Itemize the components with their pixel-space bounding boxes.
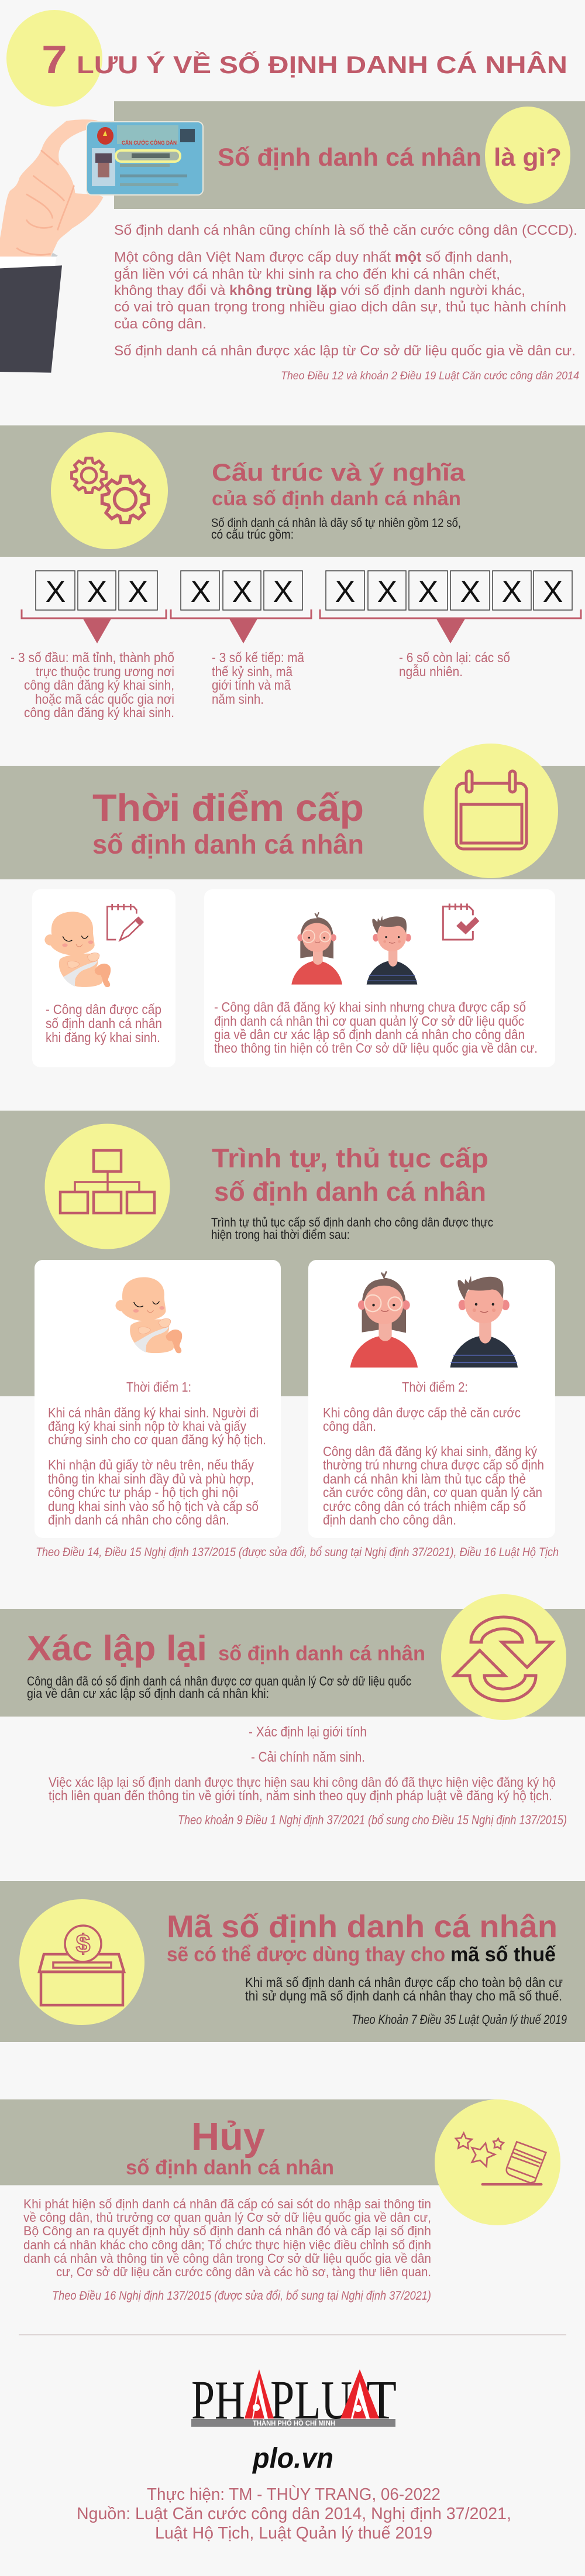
text block: gắn liền với cá nhân từ khi sinh ra cho đến khi cá nhân chết, (114, 266, 500, 282)
card text: gia về dân cư xác lập số định danh cá nhân cho công dân (214, 1027, 525, 1042)
panel: re-establish (0, 1594, 585, 1827)
heading (126, 2115, 334, 2179)
icon: notepad with pencil (107, 904, 143, 940)
caption: next 3 digits (212, 650, 304, 707)
band (0, 1881, 585, 2042)
heading: Thời điểm cấp (92, 786, 364, 829)
icon: coin box: $ (76, 1930, 90, 1958)
icon: notepad with check (443, 903, 479, 940)
text block (245, 1975, 563, 2003)
digit labels: X (46, 575, 66, 609)
card text: đăng ký khai sinh nộp tờ khai và giấy (48, 1419, 246, 1434)
card text: khi đăng ký khai sinh. (46, 1030, 160, 1045)
digit labels: X (543, 575, 563, 609)
title: LƯU Ý VỀ SỐ ĐỊNH DANH CÁ NHÂN (77, 50, 567, 78)
icon: baby (44, 912, 111, 987)
card: time 2 (308, 1260, 555, 1538)
heading: của số định danh cá nhân (212, 488, 461, 510)
icon: org chart (44, 1124, 170, 1249)
icon: coin box (19, 1899, 144, 2025)
heading: mã số thuế (450, 1943, 556, 1966)
heading (212, 458, 466, 510)
text block: danh cá nhân và thông tin về công dân trong Cơ sở dữ liệu quốc gia về dân (23, 2251, 431, 2266)
digit labels: X (232, 575, 252, 609)
intro text: có cấu trúc gồm: (211, 528, 294, 542)
caption: first 3 digits: công dân đăng ký khai sinh, (24, 677, 174, 693)
text block: tịch liên quan đến thông tin về giới tính, năm sinh theo quy định pháp luật về đăng ký hộ tịch. (49, 1788, 552, 1803)
heading: Số định danh cá nhân (218, 143, 481, 172)
heading: Hủy (191, 2115, 265, 2159)
text block: Khi phát hiện số định danh cá nhân đã cấp có sai sót do nhập sai thông tin (23, 2197, 431, 2211)
card: time 1 (35, 1260, 281, 1538)
caption: next 3 digits: giới tính và mã (212, 677, 291, 693)
card text: - Công dân đã đăng ký khai sinh nhưng chưa được cấp số (214, 999, 526, 1015)
panel: tax code (0, 1881, 585, 2042)
card text: chứng sinh cho cơ quan đăng ký hộ tịch. (48, 1432, 266, 1447)
caption: first 3 digits: công dân đăng ký khai sinh. (24, 705, 174, 720)
logo: T (366, 2370, 397, 2431)
heading band (0, 425, 585, 557)
logo: PLU (270, 2370, 352, 2431)
heading band (0, 1609, 585, 1717)
heading (212, 1143, 488, 1207)
logo: PH (191, 2370, 245, 2431)
card text (46, 1002, 162, 1045)
text block: về công dân, thủ trưởng cơ quan quản lý Cơ sở dữ liệu quốc gia về dân cư, (23, 2210, 431, 2225)
card text: Khi công dân được cấp thẻ căn cước (323, 1405, 521, 1420)
caption: next 3 digits: thế kỷ sinh, mã (212, 664, 292, 679)
card text (214, 999, 538, 1056)
digit labels: X (377, 575, 397, 609)
card text: công dân. (323, 1419, 376, 1434)
icon: man (367, 916, 417, 985)
heading band (114, 101, 585, 209)
icon: gears (51, 432, 168, 549)
id card: CĂN CƯỚC CÔNG DÂN (122, 139, 177, 146)
text block: có vai trò quan trọng trong nhiều giao dịch dân sự, thủ tục hành chính (114, 299, 566, 315)
credits: Thực hiện: TM - THÙY TRANG, 06-2022 (147, 2485, 441, 2504)
heading: số định danh cá nhân (92, 829, 364, 859)
intro text: hiện trong hai thời điểm sau: (211, 1228, 350, 1242)
icon: hand holding card (0, 119, 104, 373)
card text: thông tin khai sinh đầy đủ và phù hợp, (48, 1471, 254, 1486)
heading: số định danh cá nhân (218, 1642, 425, 1665)
credits: Nguồn: Luật Căn cước công dân 2014, Nghị định 37/2021, (77, 2505, 511, 2523)
list (249, 1724, 367, 1765)
intro text: Công dân đã có số định danh cá nhân được cơ quan quản lý Cơ sở dữ liệu quốc (27, 1674, 411, 1688)
panel: intro (0, 10, 585, 382)
caption: last 6 digits: ngẫu nhiên. (399, 664, 463, 679)
card text: cước công dân có trách nhiệm cấp số (323, 1499, 526, 1514)
card: at birth registration (32, 889, 176, 1067)
credits: Luật Hộ Tịch, Luật Quản lý thuế 2019 (155, 2524, 432, 2543)
card text: - Công dân được cấp (46, 1002, 161, 1017)
intro text (211, 516, 461, 542)
text block (23, 2197, 431, 2279)
digit labels: X (418, 575, 438, 609)
text block (49, 1775, 556, 1803)
icon: woman (291, 912, 342, 985)
text block: Một công dân Việt Nam được cấp duy nhất một số định danh, (114, 249, 512, 265)
card text: dung khai sinh vào sổ hộ tịch và cấp số (48, 1499, 259, 1514)
heading: là gì? (494, 143, 562, 172)
card text: Khi nhận đủ giấy tờ nêu trên, nếu thấy (48, 1457, 254, 1472)
heading: số định danh cá nhân (214, 1177, 486, 1207)
title: 7 (42, 37, 67, 82)
panel: cancel (0, 2099, 560, 2303)
text block: không thay đổi và không trùng lặp với số định danh người khác, (114, 283, 525, 299)
heading: Xác lập lại (27, 1629, 207, 1668)
caption: first 3 digits: - 3 số đầu: mã tỉnh, thành phố (11, 650, 174, 665)
text block: của công dân. (114, 316, 207, 332)
title (42, 37, 567, 82)
card: already registered (204, 889, 555, 1067)
panel: structure (0, 425, 585, 720)
icon: eraser and stars (435, 2099, 560, 2225)
id card (87, 122, 203, 195)
heading: Mã số định danh cá nhân (167, 1909, 558, 1944)
intro text (27, 1674, 411, 1701)
intro text: Số định danh cá nhân là dãy số tự nhiên gồm 12 số, (211, 516, 461, 530)
icon: man (450, 1276, 518, 1368)
band circle (485, 107, 570, 204)
highlighted number (116, 150, 180, 162)
heading band (0, 1111, 585, 1396)
caption: next 3 digits: năm sinh. (212, 691, 264, 707)
footer (77, 2369, 511, 2543)
intro text: gia về dân cư xác lập số định danh cá nhân khi: (27, 1686, 269, 1701)
caption: first 3 digits (11, 650, 174, 720)
digit labels: X (460, 575, 480, 609)
heading: số định danh cá nhân (126, 2156, 334, 2179)
panel: procedure (0, 1111, 585, 1559)
intro text (211, 1216, 493, 1242)
caption: next 3 digits: - 3 số kế tiếp: mã (212, 650, 304, 665)
website: plo.vn (252, 2443, 333, 2474)
panel: issue time (0, 744, 585, 1067)
icon: refresh arrows (441, 1594, 566, 1720)
heading band (0, 2099, 497, 2185)
digit labels: X (273, 575, 293, 609)
card subtitle: Thời điểm 1: (126, 1379, 191, 1395)
caption: first 3 digits: hoặc mã các quốc gia nơi (35, 691, 174, 707)
card subtitle: Thời điểm 2: (402, 1379, 468, 1395)
text block: danh cá nhân khác cho công dân; Tổ chức thực hiện việc điều chỉnh số định (23, 2238, 431, 2252)
heading (167, 1909, 558, 1966)
text block: Bộ Công an ra quyết định hủy số định danh cá nhân đó và cấp lại số định (23, 2224, 431, 2238)
digit labels: X (87, 575, 107, 609)
digit labels (46, 575, 563, 609)
card text: theo thông tin hiện có trên Cơ sở dữ liệu quốc gia về dân cư. (214, 1040, 538, 1056)
digit boxes (36, 571, 572, 610)
logo: THÀNH PHỐ HỒ CHÍ MINH (253, 2419, 335, 2427)
text block: Số định danh cá nhân cũng chính là số thẻ căn cước công dân (CCCD). (114, 222, 577, 238)
text block: Số định danh cá nhân được xác lập từ Cơ sở dữ liệu quốc gia về dân cư. (114, 343, 576, 359)
source note: Theo Điều 16 Nghị định 137/2015 (được sửa đổi, bổ sung tại Nghị định 37/2021) (52, 2289, 431, 2303)
heading: Trình tự, thủ tục cấp (212, 1143, 488, 1173)
credits (77, 2485, 511, 2543)
decorative title circle (6, 10, 102, 107)
caption: first 3 digits: trực thuộc trung ương nơi (36, 664, 174, 679)
caption: last 6 digits (399, 650, 510, 679)
list: - Xác định lại giới tính (249, 1724, 367, 1740)
digit labels: X (191, 575, 211, 609)
card text: thường trú nhưng chưa được cấp số định (323, 1457, 544, 1472)
card text: Công dân đã đăng ký khai sinh, đăng ký (323, 1444, 537, 1459)
card text: số định danh cá nhân (46, 1016, 162, 1031)
card text (323, 1405, 544, 1527)
card text: định danh cá nhân cho công dân. (48, 1512, 229, 1527)
icon: woman (350, 1271, 418, 1368)
list: - Cải chính năm sinh. (251, 1749, 365, 1765)
caption: last 6 digits: - 6 số còn lại: các số (399, 650, 510, 665)
icon: calendar (424, 744, 558, 878)
card text: danh cá nhân khi làm thủ tục cấp thẻ (323, 1471, 526, 1486)
heading: Cấu trúc và ý nghĩa (212, 458, 466, 486)
card text: Khi cá nhân đăng ký khai sinh. Người đi (48, 1405, 259, 1420)
brackets and pointers (22, 609, 581, 643)
icon: baby (115, 1277, 182, 1353)
digit labels: X (502, 575, 522, 609)
digit labels: X (335, 575, 355, 609)
card text (48, 1405, 266, 1527)
heading band (0, 766, 585, 879)
heading: sẽ có thể được dùng thay cho (167, 1943, 445, 1966)
intro text: Trình tự thủ tục cấp số định danh cho công dân được thực (211, 1216, 493, 1229)
card text: căn cước công dân, cơ quan quản lý căn (323, 1485, 542, 1500)
heading (27, 1629, 425, 1668)
text block: cư, Cơ sở dữ liệu căn cước công dân và các hồ sơ, tàng thư liên quan. (56, 2265, 431, 2279)
text block (114, 222, 577, 359)
heading (92, 786, 364, 859)
logo (191, 2369, 397, 2431)
card text: công chức tư pháp - hộ tịch ghi nội (48, 1485, 238, 1500)
card text: định danh cho công dân. (323, 1512, 456, 1527)
card text: định danh cá nhân thì cơ quan quản lý Cơ sở dữ liệu quốc (214, 1013, 524, 1029)
digit labels: X (128, 575, 148, 609)
